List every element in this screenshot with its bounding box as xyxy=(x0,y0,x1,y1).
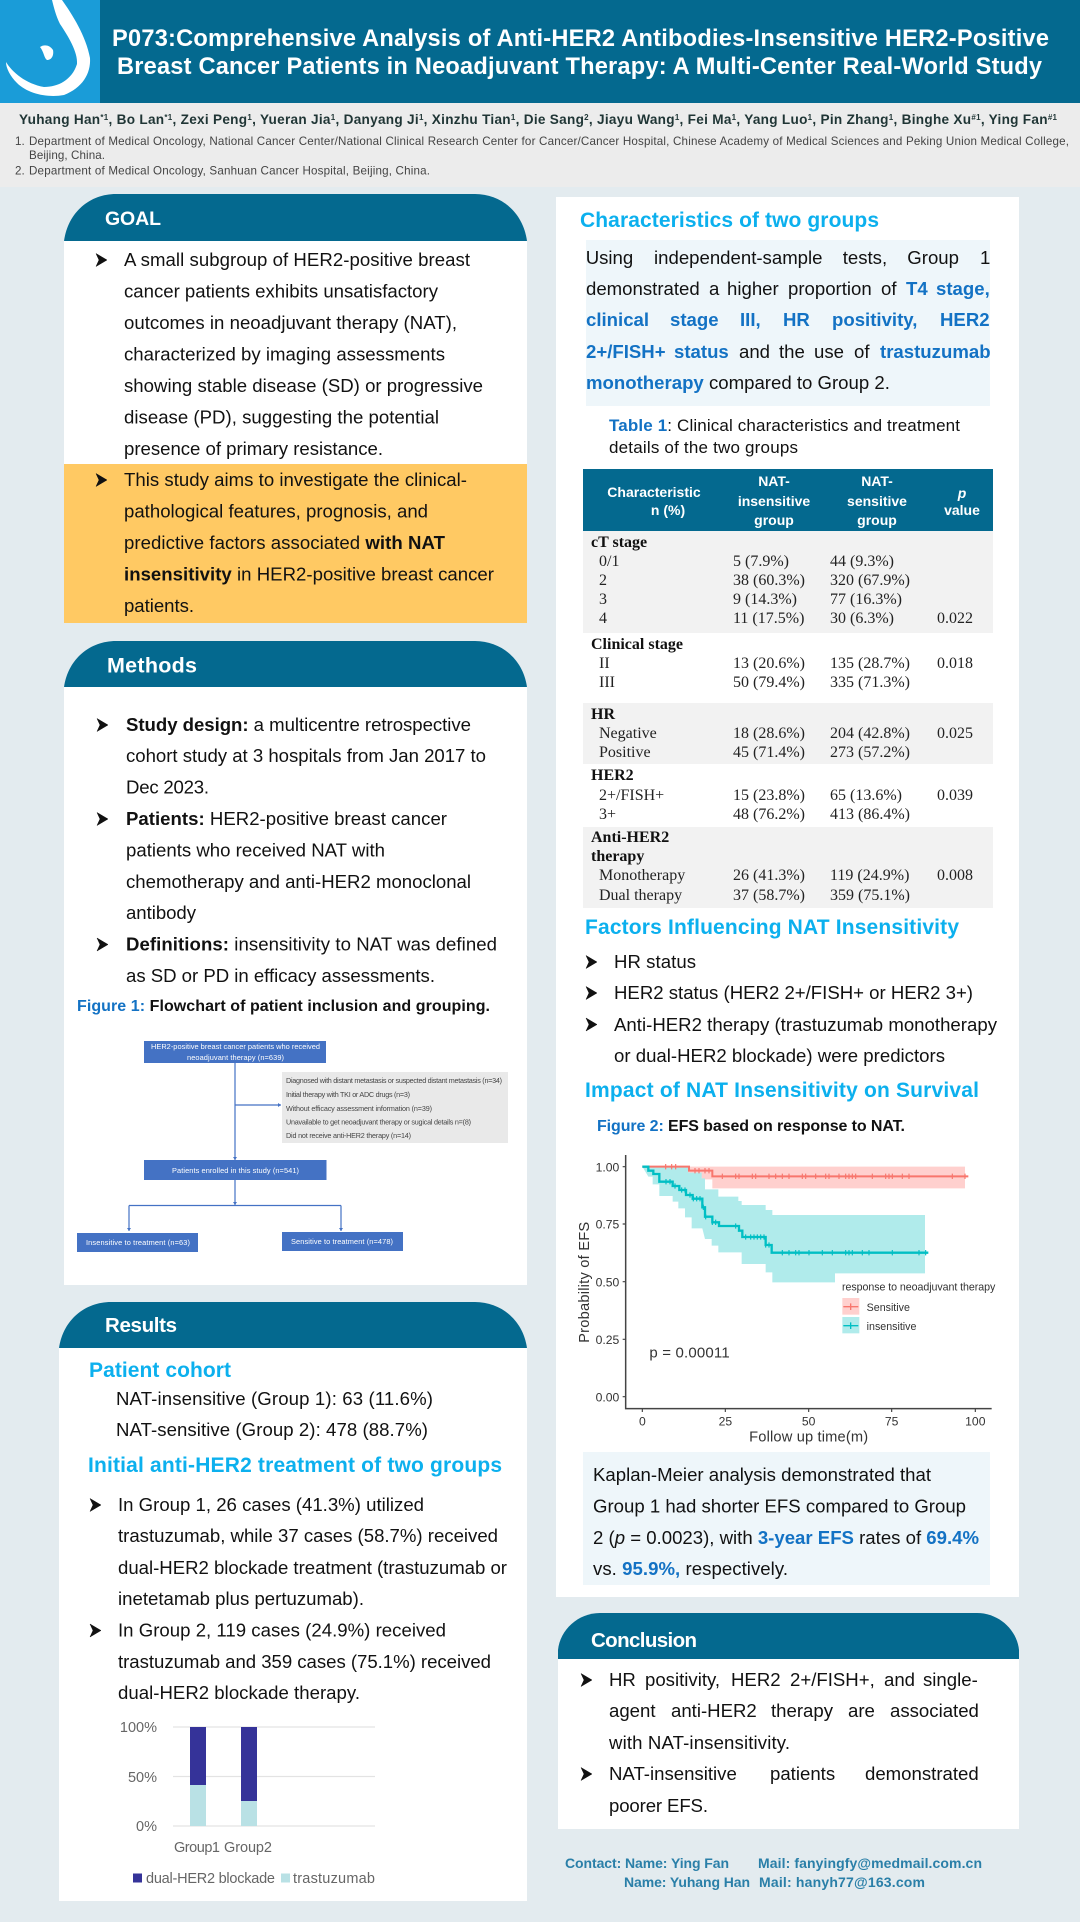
table caption xyxy=(609,416,960,457)
panel: conclusion xyxy=(558,1613,1019,1829)
contact details: Contact: Name: Ying Fan xyxy=(565,1855,729,1871)
heading: conclusion xyxy=(558,1613,1019,1659)
table header: n (%) xyxy=(651,502,685,518)
title: Breast Cancer Patients in Neoadjuvant Therapy: A Multi-Center Real-World Study xyxy=(117,54,1042,80)
text block: characteristics summary: stage xyxy=(670,309,719,330)
box: insensitive xyxy=(77,1233,198,1252)
text block: methods bullets: Definitions: insensitivity to NAT was defined xyxy=(126,934,497,954)
heading: results xyxy=(59,1302,527,1348)
table header xyxy=(607,473,980,528)
title xyxy=(112,26,1049,80)
axes: Follow up time(m) xyxy=(749,1430,868,1446)
text block: background: characterized by imaging assessments xyxy=(124,344,445,364)
text block: methods bullets: antibody xyxy=(126,902,197,923)
axes: 0 xyxy=(639,1414,646,1428)
contact details: Name: Yuhang Han xyxy=(624,1874,750,1890)
heading: factors: Factors Influencing NAT Insensitivity xyxy=(585,916,959,939)
text block: background: presence of primary resistance. xyxy=(124,438,383,459)
table rows: Monotherapy xyxy=(599,867,685,884)
text block: methods bullets: Dec 2023. xyxy=(126,776,209,798)
authors and affiliations band xyxy=(0,103,1080,187)
heading: results: Results xyxy=(105,1314,177,1337)
table rows: 30 (6.3%) xyxy=(830,610,894,627)
axes: 100 xyxy=(965,1414,986,1428)
text block: characteristics summary: compared to Group 2. xyxy=(709,372,890,393)
text block: treatment bullets: In Group 2, 119 cases (24.9%) received xyxy=(118,1620,446,1640)
table rows: II xyxy=(599,655,610,672)
authors: , Zexi Peng xyxy=(173,112,247,127)
table rows: therapy xyxy=(591,848,644,865)
box: exclusions: Diagnosed with distant metastasis or suspected distant metastasis (n=34) xyxy=(286,1076,502,1085)
authors: 1 xyxy=(889,113,894,122)
authors: 1 xyxy=(511,113,516,122)
text block: characteristics summary: demonstrated xyxy=(586,278,700,299)
text block: characteristics summary: tests, xyxy=(843,247,887,268)
text block: characteristics summary: T4 xyxy=(906,278,928,299)
authors: #1 xyxy=(1048,113,1058,122)
text block: cohort numbers: NAT-sensitive (Group 2): 478 (88.7%) xyxy=(116,1419,428,1440)
authors: 1 xyxy=(331,113,336,122)
text block: treatment bullets: trastuzumab, while 37 cases (58.7%) received xyxy=(118,1525,498,1546)
authors: , Die Sang xyxy=(516,112,584,127)
box: exclusions: Unavailable to get neoadjuvant therapy or sugical details n=(8) xyxy=(286,1118,471,1126)
authors: *1 xyxy=(100,113,109,122)
table rows: 320 (67.9%) xyxy=(830,572,910,589)
text block: characteristics summary xyxy=(586,240,991,406)
panel: characteristics and survival xyxy=(556,197,1019,1597)
text block: background: disease (PD), suggesting the potential xyxy=(124,406,439,428)
box: exclusions: Without efficacy assessment information (n=39) xyxy=(286,1104,432,1113)
text block: aim: This study aims to investigate the clinical- xyxy=(124,469,467,490)
table rows: 26 (41.3%) xyxy=(733,867,805,884)
authors: , Yueran Jia xyxy=(252,112,331,127)
box: insensitive: Insensitive to treatment (n=63) xyxy=(86,1238,190,1247)
table rows: 15 (23.8%) xyxy=(733,787,805,804)
text block: factors bullets: Anti-HER2 therapy (trastuzumab monotherapy xyxy=(614,1014,998,1035)
text block: conclusion bullets: 2+/FISH+, xyxy=(790,1669,875,1690)
text block: factors bullets: HER2 status (HER2 2+/FISH+ or HER2 3+) xyxy=(614,982,973,1003)
table: clinical characteristics xyxy=(583,469,993,908)
contact details: Mail: hanyh77@163.com xyxy=(759,1874,925,1890)
axes: Probability of EFS xyxy=(577,1222,593,1343)
text block: aim: patients. xyxy=(124,595,194,616)
p value: p = 0.00011 xyxy=(649,1344,730,1361)
table rows: 5 (7.9%) xyxy=(733,553,789,570)
text block: characteristics summary: of xyxy=(881,278,897,299)
text block: characteristics summary: a xyxy=(709,278,720,299)
text block: characteristics summary: III, xyxy=(740,309,761,330)
affiliations: Department of Medical Oncology, Sanhuan Cancer Hospital, Beijing, China. xyxy=(29,164,430,178)
bar chart: 100% xyxy=(120,1720,157,1736)
text block: methods bullets: Study design: a multicentre retrospective xyxy=(126,714,471,735)
table rows: 45 (71.4%) xyxy=(733,744,805,761)
text block: characteristics summary: monotherapy xyxy=(586,372,704,393)
text block: conclusion bullets: positivity, xyxy=(645,1669,720,1690)
table rows: 135 (28.7%) xyxy=(830,655,910,672)
authors: , Yang Luo xyxy=(736,112,807,127)
axes: 0.75 xyxy=(596,1218,620,1232)
text block: background: cancer patients exhibits unsatisfactory xyxy=(124,280,439,302)
authors: , Pin Zhang xyxy=(812,112,888,127)
text block: factors bullets xyxy=(586,951,998,1066)
table rows: 359 (75.1%) xyxy=(830,887,910,904)
heading: methods xyxy=(64,641,527,687)
box: exclusions: Did not receive anti-HER2 therapy (n=14) xyxy=(286,1131,411,1140)
table rows: 13 (20.6%) xyxy=(733,655,805,672)
table rows: 3 xyxy=(599,591,607,608)
text block: background: showing stable disease (SD) or progressive xyxy=(124,375,483,396)
table rows: Negative xyxy=(599,725,657,742)
authors: #1 xyxy=(971,113,981,122)
text block: characteristics summary: the xyxy=(779,341,805,362)
text block: background xyxy=(96,249,483,459)
affiliations: 1. xyxy=(15,135,25,148)
authors: , Jiayu Wang xyxy=(589,112,675,127)
table rows: 273 (57.2%) xyxy=(830,744,910,761)
text block: factors bullets: HR status xyxy=(614,951,696,972)
table rows: 0/1 xyxy=(599,553,619,570)
table rows: 37 (58.7%) xyxy=(733,887,805,904)
text block: survival summary xyxy=(583,1452,990,1585)
text block: characteristics summary: HR xyxy=(783,309,810,330)
text block: cohort numbers: NAT-insensitive (Group 1): 63 (11.6%) xyxy=(116,1388,433,1409)
authors: , Danyang Ji xyxy=(335,112,419,127)
confidence bands xyxy=(642,1167,965,1282)
heading: conclusion: Conclusion xyxy=(591,1629,697,1652)
axes: 75 xyxy=(885,1414,899,1428)
box: start xyxy=(144,1041,326,1063)
table header: group xyxy=(754,512,794,528)
bar chart: Group1 xyxy=(174,1840,220,1856)
text block: conclusion bullets: associated xyxy=(890,1700,979,1721)
table caption: details of the two groups xyxy=(609,438,798,457)
table rows: III xyxy=(599,674,615,691)
table rows: Clinical stage xyxy=(591,636,683,653)
title: P073:Comprehensive Analysis of Anti-HER2 Antibodies-Insensitive HER2-Positive xyxy=(112,26,1049,52)
chart legend: Sensitive xyxy=(867,1302,910,1314)
axes: 1.00 xyxy=(596,1160,620,1174)
box: sensitive xyxy=(282,1232,403,1251)
chart legend: insensitive xyxy=(867,1321,916,1333)
authors: 1 xyxy=(247,113,252,122)
table rows: 48 (76.2%) xyxy=(733,806,805,823)
panel: goal xyxy=(64,194,527,623)
heading: characteristics: Characteristics of two groups xyxy=(580,209,879,232)
table caption: Table 1: Clinical characteristics and treatment xyxy=(609,416,960,435)
text block: conclusion bullets: demonstrated xyxy=(865,1763,979,1784)
text block: methods bullets: patients who received NAT with xyxy=(126,840,385,860)
table header: NAT- xyxy=(861,473,893,489)
table rows: 413 (86.4%) xyxy=(830,806,910,823)
table rows: 0.018 xyxy=(937,655,973,672)
table header: Characteristic xyxy=(607,484,701,500)
table rows: 77 (16.3%) xyxy=(830,591,902,608)
authors: *1 xyxy=(164,113,173,122)
text block: characteristics summary: of xyxy=(854,341,870,362)
text block: characteristics summary: positivity, xyxy=(832,309,917,330)
authors: 1 xyxy=(732,113,737,122)
affiliations: Department of Medical Oncology, National Cancer Center/National Clinical Research Center for Cancer/Cancer Hospital, Chinese Academy of Medical Sciences and Peking Union Medical College, xyxy=(29,135,1069,148)
authors: , Xinzhu Tian xyxy=(424,112,511,127)
text block: background: outcomes in neoadjuvant therapy (NAT), xyxy=(124,312,457,333)
table rows: 0.039 xyxy=(937,787,973,804)
icon: logo xyxy=(0,0,100,103)
authors: 1 xyxy=(419,113,424,122)
table header: p xyxy=(957,485,967,501)
table rows: 0.025 xyxy=(937,725,973,742)
table rows: 44 (9.3%) xyxy=(830,553,894,570)
chart legend xyxy=(842,1281,996,1333)
text block: conclusion bullets: NAT-insensitive xyxy=(609,1763,737,1784)
table rows: 38 (60.3%) xyxy=(733,572,805,589)
table rows: 4 xyxy=(599,610,607,627)
text block: characteristics summary: 1 xyxy=(980,247,990,268)
figure 1 caption: Figure 1: Flowchart of patient inclusion and grouping. xyxy=(77,998,490,1015)
text block: treatment bullets: trastuzumab and 359 cases (75.1%) received xyxy=(118,1651,491,1672)
box: exclusions xyxy=(282,1072,508,1143)
box: sensitive: Sensitive to treatment (n=478) xyxy=(291,1237,393,1246)
text block: conclusion bullets: agent xyxy=(609,1700,656,1721)
text block: conclusion bullets: HR xyxy=(609,1669,636,1690)
authors: 1 xyxy=(675,113,680,122)
text block: aim: predictive factors associated with NAT xyxy=(124,532,446,553)
text block: conclusion bullets xyxy=(581,1669,979,1816)
authors: , Ying Fan xyxy=(981,112,1048,127)
box: exclusions: Initial therapy with TKI or ADC drugs (n=3) xyxy=(286,1090,410,1099)
table rows: 18 (28.6%) xyxy=(733,725,805,742)
table rows: 65 (13.6%) xyxy=(830,787,902,804)
table rows: 2 xyxy=(599,572,607,589)
box: enrolled: Patients enrolled in this study (n=541) xyxy=(172,1166,299,1175)
text block: conclusion bullets: with NAT-insensitivity. xyxy=(608,1732,790,1753)
text block: background: A small subgroup of HER2-positive breast xyxy=(124,249,471,270)
header banner xyxy=(0,0,1080,103)
authors: Yuhang Han xyxy=(19,112,100,127)
text block: aim: pathological features, prognosis, and xyxy=(124,500,428,522)
table rows: 9 (14.3%) xyxy=(733,591,797,608)
chart legend xyxy=(133,1871,375,1887)
authors: , Binghe Xu xyxy=(893,112,971,127)
axes xyxy=(577,1155,992,1446)
text block: methods bullets: chemotherapy and anti-HER2 monoclonal xyxy=(126,871,471,892)
axes: 0.50 xyxy=(596,1275,620,1289)
text block: characteristics summary: independent-sample xyxy=(654,247,822,268)
table rows: 0.008 xyxy=(937,867,973,884)
table rows: cT stage xyxy=(591,534,647,551)
text block: methods bullets: as SD or PD in efficacy assessments. xyxy=(126,965,435,986)
text block: characteristics summary: and xyxy=(739,341,770,362)
chart legend: dual-HER2 blockade xyxy=(146,1871,275,1887)
box: enrolled xyxy=(144,1160,326,1180)
table header: group xyxy=(857,512,897,528)
affiliations xyxy=(15,135,1069,178)
chart: Kaplan-Meier curve xyxy=(577,1155,996,1446)
text block: methods bullets: cohort study at 3 hospitals from Jan 2017 to xyxy=(126,745,486,766)
heading: impact: Impact of NAT Insensitivity on Survival xyxy=(585,1079,979,1102)
text block: treatment bullets: dual-HER2 blockade therapy. xyxy=(118,1682,360,1703)
text block: characteristics summary: status xyxy=(674,341,729,362)
axes: 0.00 xyxy=(596,1391,620,1405)
authors: , Bo Lan xyxy=(109,112,164,127)
heading: goal: GOAL xyxy=(105,208,161,230)
chart legend: trastuzumab xyxy=(293,1871,375,1887)
text block: characteristics summary: Using xyxy=(586,247,633,268)
text block: cohort numbers xyxy=(116,1388,433,1440)
text block: survival summary: 2 (p = 0.0023), with 3-year EFS rates of 69.4% xyxy=(593,1527,979,1548)
affiliations: 2. xyxy=(15,164,25,178)
panel: methods xyxy=(64,641,527,1285)
text block: conclusion bullets: HER2 xyxy=(731,1669,781,1690)
text block: characteristics summary: stage, xyxy=(936,278,990,299)
bar chart: 0% xyxy=(136,1819,157,1835)
text block: conclusion bullets: patients xyxy=(770,1763,835,1784)
survival line: sensitive xyxy=(642,1164,968,1179)
axes: 25 xyxy=(719,1414,732,1428)
table rows: 50 (79.4%) xyxy=(733,674,805,691)
affiliations: Beijing, China. xyxy=(29,149,105,162)
table rows: 335 (71.3%) xyxy=(830,674,910,691)
text block: conclusion bullets: anti-HER2 xyxy=(671,1700,757,1721)
text block: characteristics summary: use xyxy=(814,341,844,362)
axes: 50 xyxy=(802,1414,816,1428)
survival line: insensitive xyxy=(642,1167,928,1255)
text block: conclusion bullets: are xyxy=(848,1700,875,1721)
contact details: Mail: fanyingfy@medmail.com.cn xyxy=(758,1855,982,1871)
heading: initial treatment: Initial anti-HER2 treatment of two groups xyxy=(88,1454,502,1477)
text block: treatment bullets: In Group 1, 26 cases (41.3%) utilized xyxy=(118,1494,424,1515)
table header: sensitive xyxy=(847,493,907,509)
text block: treatment bullets: inetetamab plus pertuzumab). xyxy=(118,1588,364,1609)
table header: NAT- xyxy=(758,473,790,489)
text block: characteristics summary: 2+/FISH+ xyxy=(586,341,666,362)
text block: conclusion bullets: and xyxy=(884,1669,915,1690)
heading: methods: Methods xyxy=(107,654,197,678)
table rows: 3+ xyxy=(599,806,616,823)
axes: 0.25 xyxy=(596,1333,620,1347)
text block: characteristics summary: trastuzumab xyxy=(880,341,991,362)
figure 2 caption: Figure 2: EFS based on response to NAT. xyxy=(597,1118,905,1135)
bar chart: Group2 xyxy=(224,1840,272,1856)
text block: survival summary: Group 1 had shorter EFS compared to Group xyxy=(593,1496,966,1516)
table rows: HER2 xyxy=(591,767,634,784)
text block: characteristics summary: proportion xyxy=(788,278,872,299)
panel: results xyxy=(59,1302,527,1901)
table rows: 2+/FISH+ xyxy=(599,787,664,804)
text block: survival summary: Kaplan-Meier analysis demonstrated that xyxy=(593,1464,932,1485)
text block: methods bullets xyxy=(97,714,497,986)
text block: conclusion bullets: therapy xyxy=(771,1700,834,1721)
heading: patient cohort: Patient cohort xyxy=(89,1359,231,1382)
text block: methods bullets: Patients: HER2-positive breast cancer xyxy=(126,808,447,829)
table rows: Anti-HER2 xyxy=(591,829,669,846)
table header: insensitive xyxy=(738,493,810,509)
text block: aim xyxy=(96,469,494,616)
text block: aim: insensitivity in HER2-positive breast cancer xyxy=(124,564,494,584)
authors: , Fei Ma xyxy=(680,112,732,127)
text block: characteristics summary: clinical xyxy=(586,309,649,330)
authors: 1 xyxy=(808,113,813,122)
chart legend: response to neoadjuvant therapy xyxy=(842,1281,996,1293)
table rows: HR xyxy=(591,706,615,723)
contact details xyxy=(565,1855,982,1890)
table header: value xyxy=(944,502,980,518)
text block: survival summary: vs. 95.9%, respectively. xyxy=(593,1558,788,1579)
table rows: Dual therapy xyxy=(599,887,682,904)
table rows: Positive xyxy=(599,744,651,761)
text block: characteristics summary: higher xyxy=(727,278,779,299)
table rows: 0.022 xyxy=(937,610,973,627)
table rows: 11 (17.5%) xyxy=(733,610,804,627)
text block: conclusion bullets: poorer EFS. xyxy=(609,1795,708,1816)
text block: treatment bullets: dual-HER2 blockade treatment (trastuzumab or xyxy=(118,1557,507,1578)
text block: treatment bullets xyxy=(90,1494,507,1703)
flowchart xyxy=(77,1041,508,1252)
authors: 2 xyxy=(584,113,589,122)
box: start: neoadjuvant therapy (n=639) xyxy=(187,1053,284,1062)
text block: factors bullets: or dual-HER2 blockade) were predictors xyxy=(614,1045,945,1066)
table rows xyxy=(591,534,973,904)
bar chart xyxy=(120,1720,375,1887)
bar chart: 50% xyxy=(128,1770,157,1786)
text block: characteristics summary: Group xyxy=(907,247,959,268)
text block: characteristics summary: HER2 xyxy=(940,309,990,330)
heading: goal xyxy=(64,194,527,241)
box: start: HER2-positive breast cancer patients who received xyxy=(151,1042,320,1051)
table rows: 119 (24.9%) xyxy=(830,867,909,884)
table rows: 204 (42.8%) xyxy=(830,725,910,742)
text block: conclusion bullets: single- xyxy=(923,1669,978,1690)
